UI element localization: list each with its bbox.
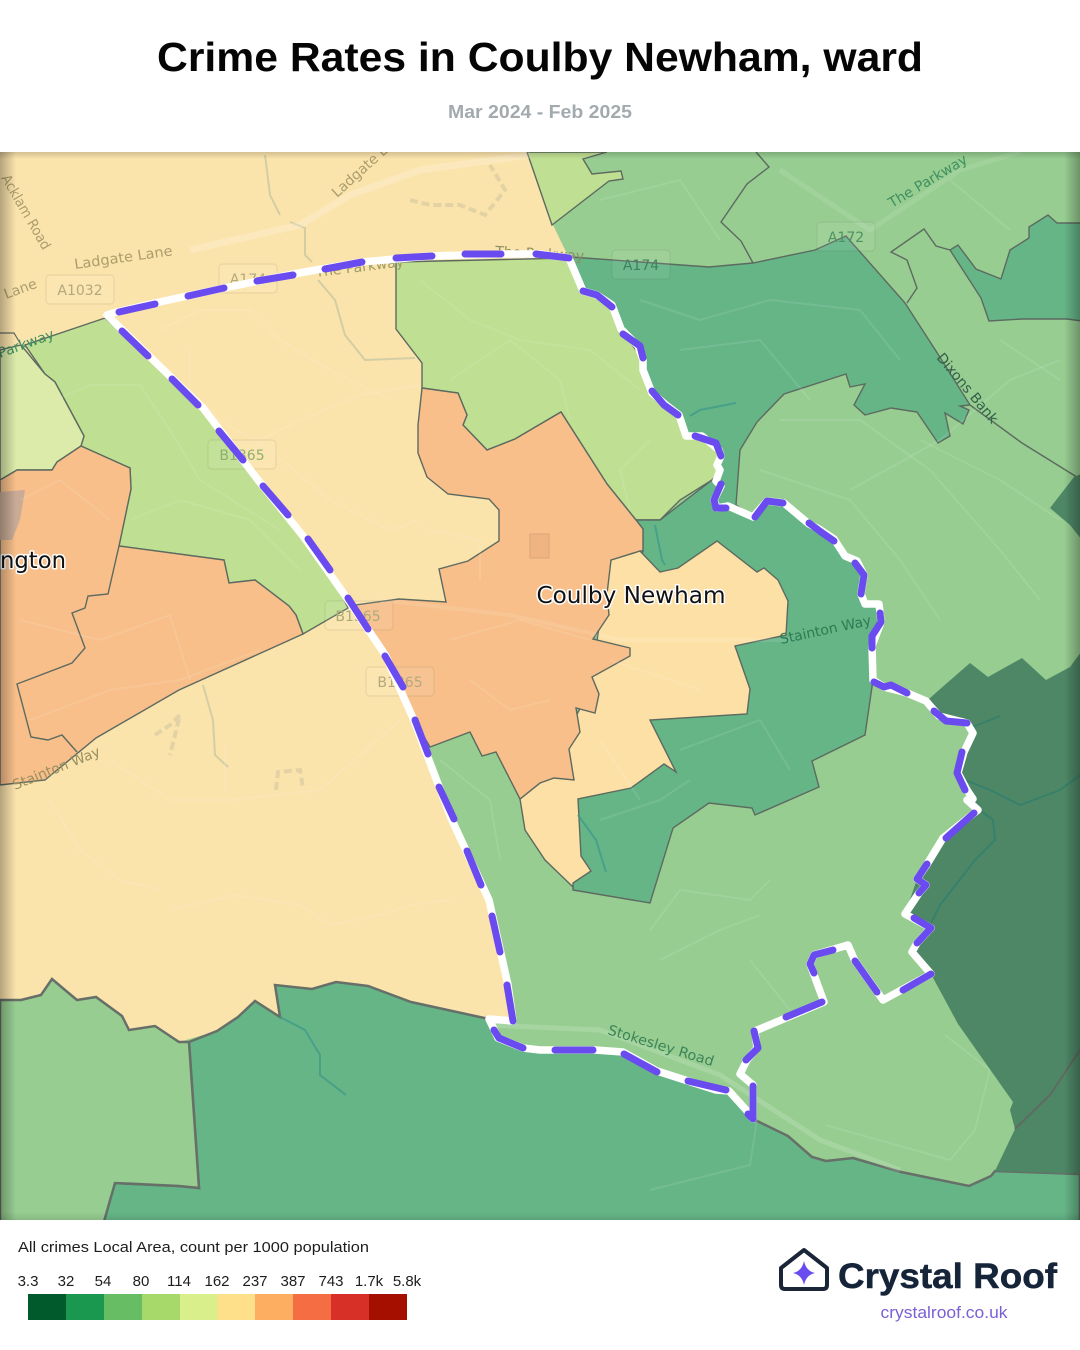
- area: middle lime: [396, 258, 721, 520]
- shield: B1365 south: [366, 667, 434, 696]
- website url: crystalroof.co.uk: [880, 1304, 1008, 1322]
- boundary line: Dixons Bank diagonal: [970, 405, 1080, 479]
- legend title: All crimes Local Area, count per 1000 population: [18, 1239, 369, 1256]
- area: east yellow: [520, 541, 788, 887]
- boundary line: north-east pocket: [891, 229, 950, 303]
- faint hatched block near Ladgate: [410, 165, 505, 215]
- legend colour bar: [28, 1294, 407, 1320]
- title: Crime Rates in Coulby Newham, ward: [157, 34, 923, 80]
- legend scale labels: 114: [167, 1273, 191, 1290]
- label: Stokesley Road: Stokesley Road: [606, 1023, 716, 1070]
- water courses on yellow: [203, 155, 415, 767]
- label: Ladgate Lane fragment north: Ladgate L: [329, 143, 391, 201]
- boundary line: small north-west pocket: [0, 333, 20, 343]
- logo: Crystal Roof: [781, 1250, 1057, 1322]
- faint road network: [20, 152, 1060, 1190]
- label: Lane fragment: Lane: [2, 276, 39, 303]
- shield: B1365 north: [208, 440, 276, 469]
- legend scale labels: 162: [204, 1273, 230, 1290]
- legend scale labels: 743: [318, 1273, 344, 1290]
- label: The Parkway middle: The Parkway: [494, 244, 585, 265]
- feature: grey block in west orange: [0, 490, 25, 540]
- shield: B1365 south: B1365: [377, 675, 423, 691]
- area: north-west lime strip: [25, 318, 348, 634]
- label: Stainton Way east: Stainton Way: [779, 613, 873, 648]
- shield: B1365 middle: B1365: [335, 609, 381, 625]
- ward boundary: white line: [107, 254, 978, 1119]
- legend scale labels: 80: [133, 1273, 149, 1290]
- shield: A174 west: A174: [230, 272, 266, 288]
- boundary lines within west orange: [17, 546, 119, 752]
- shield: A1032: [46, 275, 114, 304]
- legend scale labels: [18, 1273, 422, 1290]
- shield: B1365 middle: [325, 601, 393, 630]
- shield: A172: A172: [828, 230, 864, 246]
- water courses: [280, 403, 1080, 1095]
- boundary line: far-east south: [1014, 1048, 1080, 1130]
- area: east dark wedge: [1050, 474, 1080, 538]
- area: pale lime far west: [0, 345, 84, 480]
- shield: A1032: A1032: [57, 283, 103, 299]
- label: Ladgate Lane: Ladgate Lane: [73, 243, 174, 273]
- area: large yellow west: [0, 152, 569, 1042]
- subtitle: date range: Mar 2024 - Feb 2025: [448, 102, 632, 122]
- logo wordmark: Crystal Roof: [838, 1257, 1057, 1296]
- shield: A174 west: [219, 264, 277, 293]
- ward boundary: purple dashes: [119, 254, 974, 1119]
- area: central dark green: [571, 236, 970, 903]
- feature: building in central orange: [530, 534, 549, 558]
- area: south dark green: [100, 982, 1080, 1225]
- shield: A172: [817, 222, 875, 251]
- place label: Coulby Newham: Coulby Newham: [536, 583, 726, 609]
- area: top lime wedge: [527, 152, 623, 225]
- icon: house with star: [781, 1250, 827, 1289]
- label: Dixons Bank: Dixons Bank: [933, 350, 1002, 428]
- map edge vignette: [0, 152, 1080, 1220]
- legend scale labels: 5.8k: [393, 1273, 422, 1290]
- faint hatched block south: [155, 715, 180, 755]
- legend: [18, 1239, 422, 1320]
- area: lower-left light green: [0, 979, 199, 1225]
- legend scale labels: 387: [280, 1273, 306, 1290]
- boundary line: edge of east cluster: [721, 152, 769, 263]
- place label: ngton fragment: ngton: [0, 548, 66, 574]
- area: west orange: [0, 446, 303, 785]
- legend scale labels: 32: [58, 1273, 74, 1290]
- label: The Parkway north-east: The Parkway: [885, 152, 970, 212]
- area: central orange: [355, 388, 643, 799]
- legend scale labels: 3.3: [18, 1273, 38, 1290]
- shield: A174 east: A174: [623, 258, 659, 274]
- shield: B1365 north: B1365: [219, 448, 265, 464]
- label: The Parkway west: The Parkway: [314, 254, 405, 281]
- label: Stainton Way west: Stainton Way: [11, 744, 103, 794]
- shield: A174 east: [612, 250, 670, 279]
- area: upper-right dark green: [950, 215, 1080, 322]
- legend scale labels: 54: [95, 1273, 111, 1290]
- legend scale labels: 237: [242, 1273, 268, 1290]
- area: far-east darkest green: [905, 640, 1080, 1174]
- map base: light green area: [182, 152, 1080, 1185]
- legend scale labels: 1.7k: [355, 1273, 384, 1290]
